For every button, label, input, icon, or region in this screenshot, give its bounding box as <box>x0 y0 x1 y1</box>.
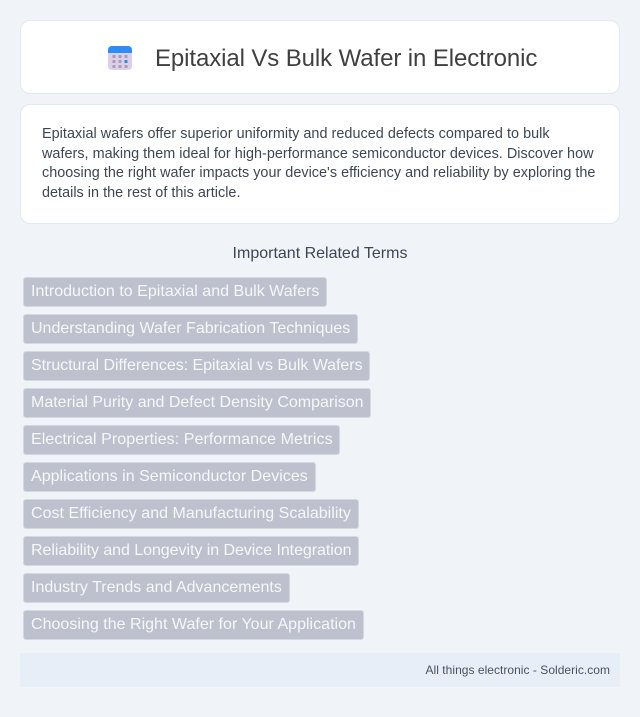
tag 9: Industry Trends and Advancements <box>31 579 282 596</box>
title: Epitaxial Vs Bulk Wafer in Electronic <box>155 45 537 72</box>
term tags <box>23 277 371 640</box>
tag 6: Applications in Semiconductor Devices <box>31 468 308 485</box>
tag 2 <box>23 314 358 344</box>
intro text <box>42 126 595 200</box>
intro text: details in the rest of this article. <box>42 184 240 200</box>
intro text: Epitaxial wafers offer superior uniformity and reduced defects compared to bulk <box>42 126 550 142</box>
tag 4 <box>23 388 371 418</box>
tag 3: Structural Differences: Epitaxial vs Bulk Wafers <box>31 357 363 374</box>
tag 3 <box>23 351 370 381</box>
tag 7: Cost Efficiency and Manufacturing Scalability <box>31 505 351 522</box>
tag 1: Introduction to Epitaxial and Bulk Wafers <box>31 283 319 300</box>
tag 2: Understanding Wafer Fabrication Techniques <box>31 320 350 337</box>
tag 1 <box>23 277 327 307</box>
tag 10: Choosing the Right Wafer for Your Application <box>31 616 356 633</box>
tag 9 <box>23 573 290 603</box>
icon: calendar <box>108 46 132 70</box>
header card <box>20 20 620 94</box>
tag 4: Material Purity and Defect Density Comparison <box>31 394 364 411</box>
tag 8 <box>23 536 359 566</box>
footer <box>20 653 620 687</box>
tag 5 <box>23 425 340 455</box>
footer text: All things electronic - Solderic.com <box>426 663 610 677</box>
tag 5: Electrical Properties: Performance Metrics <box>31 431 333 448</box>
tag 8: Reliability and Longevity in Device Integration <box>31 542 352 559</box>
intro text: choosing the right wafer impacts your device's efficiency and reliability by exploring the <box>42 165 595 181</box>
tag 10 <box>23 610 364 640</box>
intro text: wafers, making them ideal for high-performance semiconductor devices. Discover how <box>42 146 594 162</box>
section heading: Important Related Terms <box>233 245 407 262</box>
intro card <box>20 104 620 224</box>
tag 6 <box>23 462 316 492</box>
tag 7 <box>23 499 359 529</box>
